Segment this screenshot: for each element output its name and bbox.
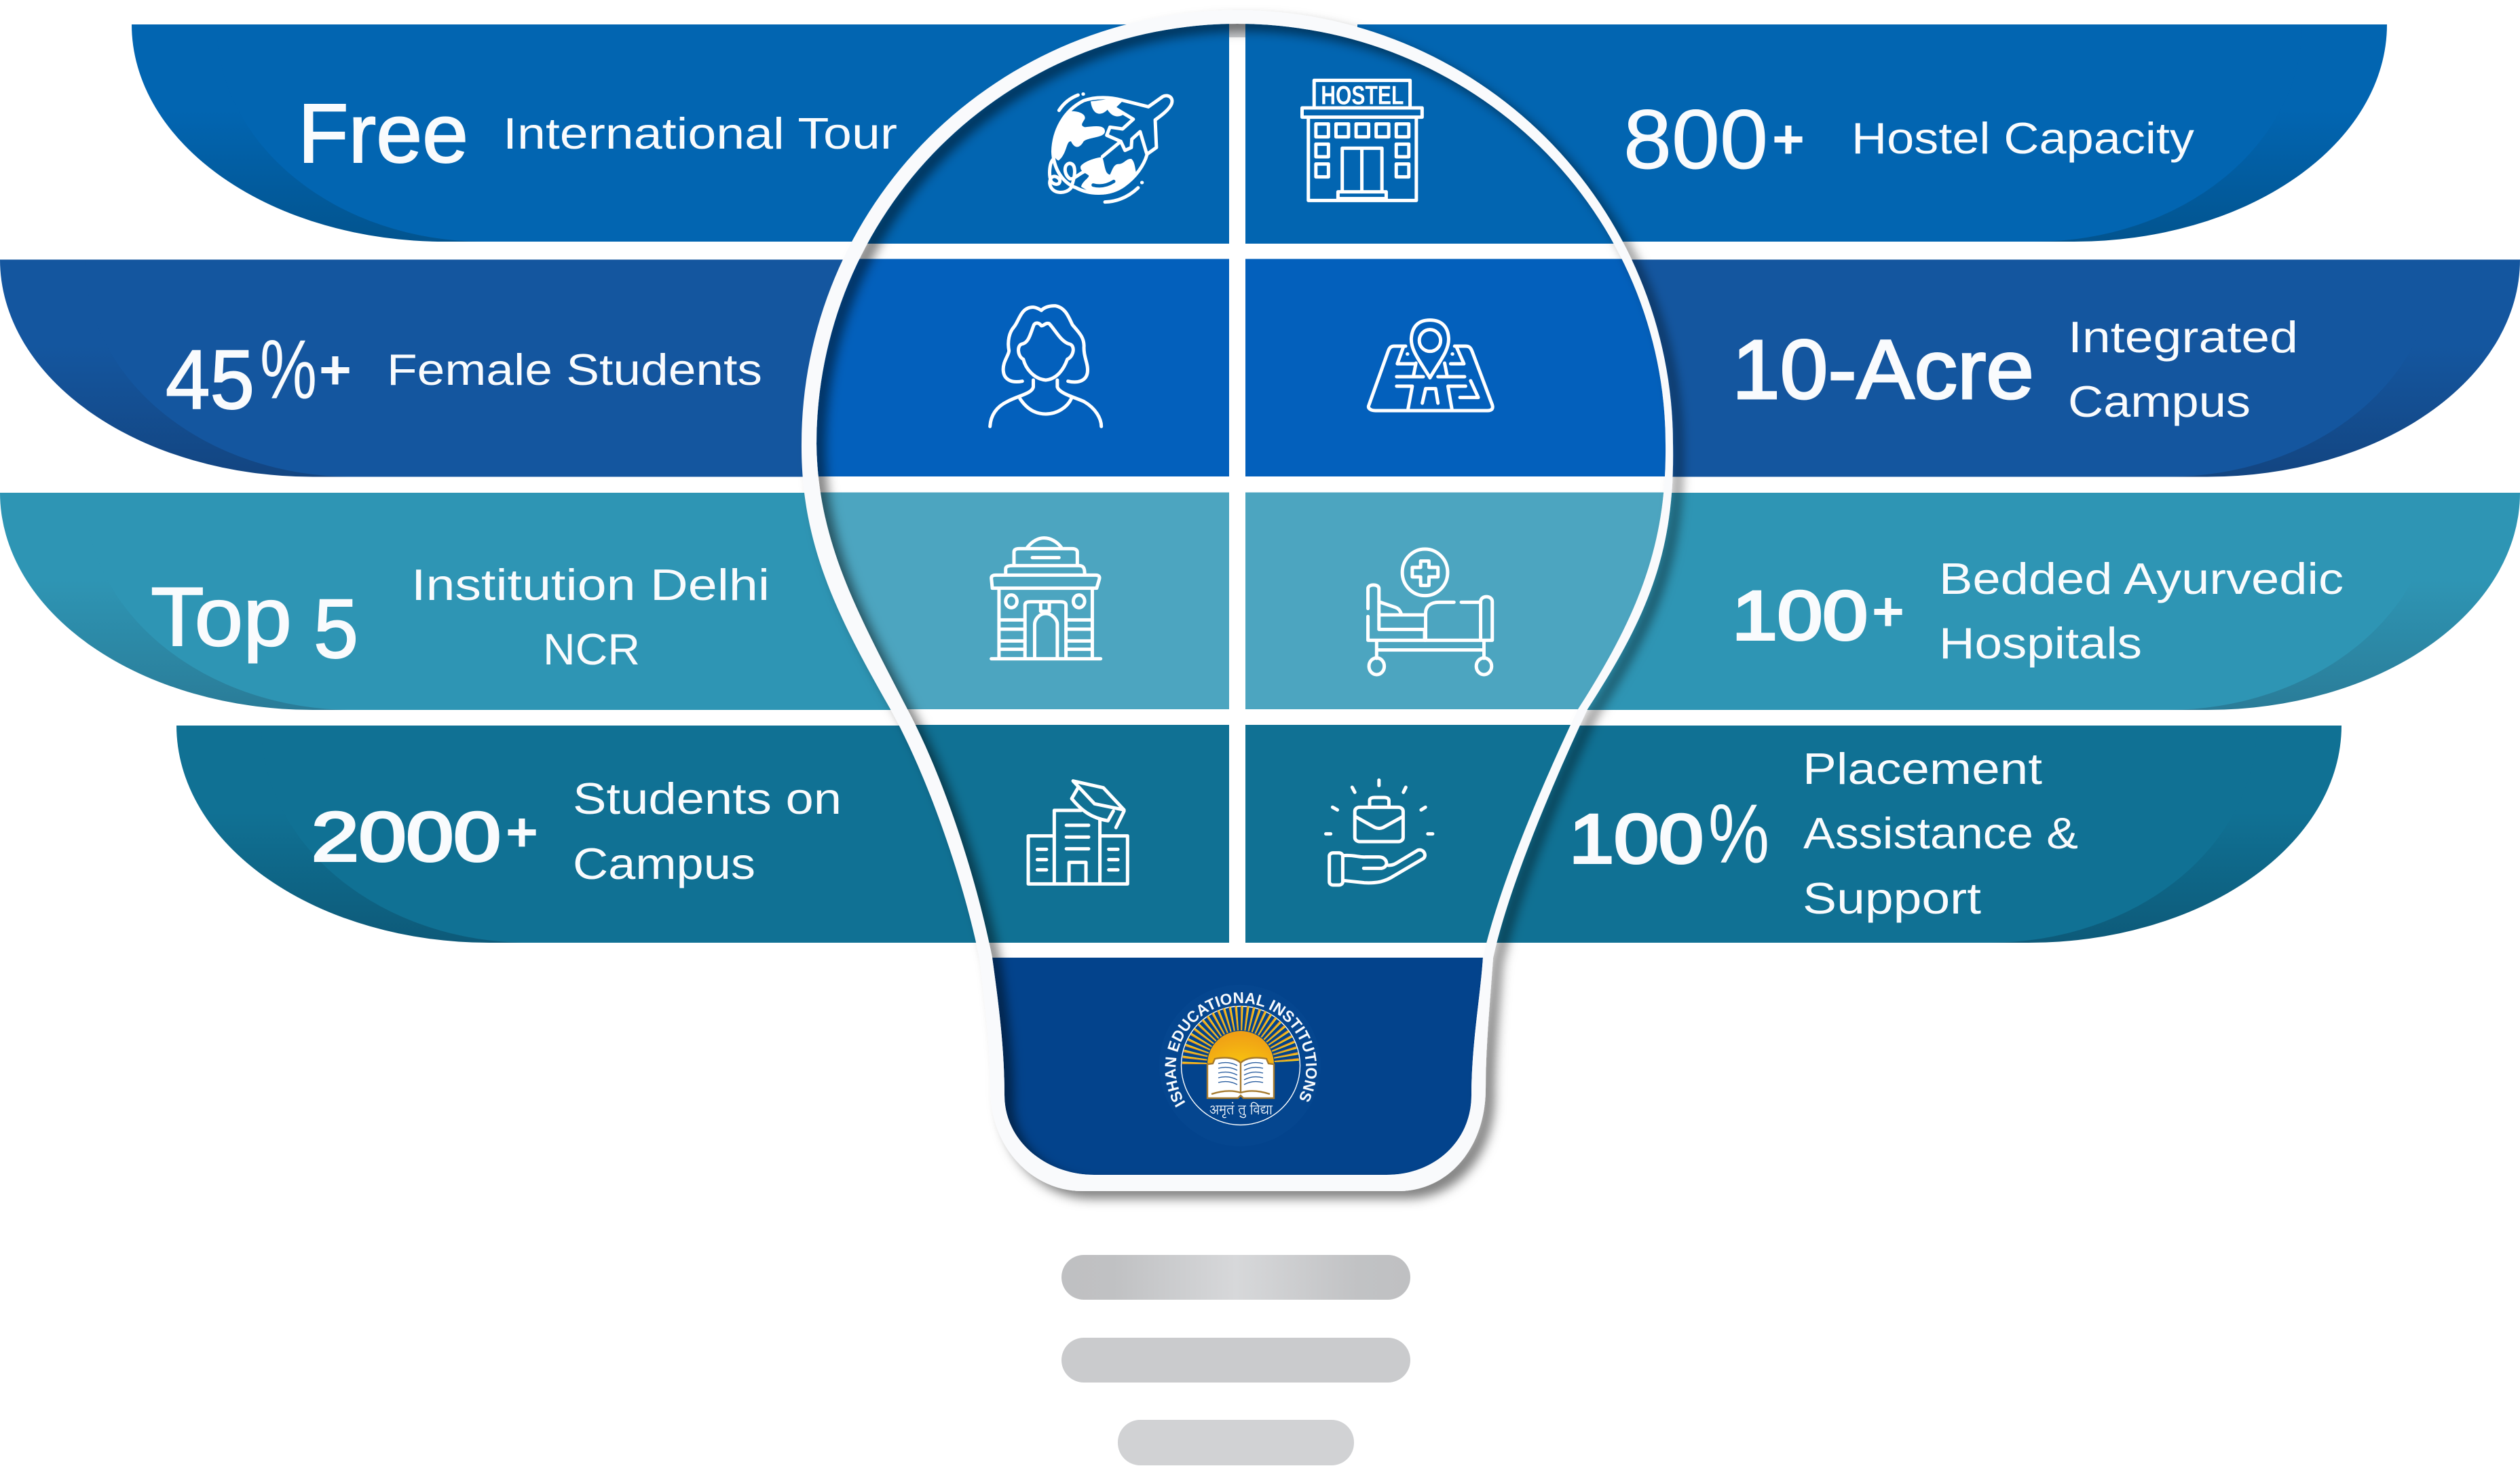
panel: 100% Placement Assistance and Support [1493,726,2342,943]
panel: Free International Tour [132,24,1154,242]
panel: Top 5 Institution Delhi NCR [0,493,950,710]
bulb base: top pill [1061,1255,1410,1300]
icon: briefcase on open hand [1326,780,1433,885]
icon: campus building with graduation cap [1028,781,1127,884]
text: Students on Campus [573,774,842,888]
icon: India Gate monument [992,538,1101,659]
text: Placement Assistance and Support: Placement [1803,744,2042,793]
text: Integrated Campus: Integrated [2068,312,2298,362]
logo rays [1195,1018,1287,1110]
headline: 100+ [1732,577,1904,654]
bulb outline ring [802,10,1673,1191]
headline: Free: Free [298,88,468,181]
icon: hospital bed [1368,549,1492,675]
panel: 45%+ Female Students [0,259,950,476]
headline: 800+: 800 [1623,94,1768,187]
headline: 10-Acre: 10-Acre [1732,324,2034,417]
headline: 2000+: + [506,802,538,863]
icon: globe and plane [1050,94,1172,202]
text: Institution Delhi NCR [411,560,770,674]
text: Hostel Capacity: Hostel Capacity [1851,113,2195,163]
vertical divider through bulb [1229,17,1245,37]
text: Integrated Campus [2068,312,2298,426]
headline: 2000+ [312,798,538,876]
panel: 10-Acre Integrated Campus [1561,259,2520,476]
panel: 2000+ Students on Campus [176,726,1018,943]
logo open book [1207,1057,1274,1098]
headline: 100+: 100 [1732,577,1868,654]
text: Placement Assistance and Support [1803,744,2078,923]
headline: 100%: % [1708,788,1769,881]
text: Institution Delhi NCR: NCR [543,624,640,674]
text: Bedded Ayurvedic Hospitals [1939,554,2344,668]
text: Students on Campus: Students on [573,774,842,823]
headline: 100+: + [1872,581,1904,643]
icon: hostel building: HOSTEL [1321,80,1404,110]
logo: Ishan Educational Institutions emblem [1165,992,1317,1125]
text: Institution Delhi NCR: Institution Delhi [411,560,770,609]
bulb base: middle pill [1061,1338,1410,1383]
text: Placement Assistance and Support: Assistance & [1803,808,2078,858]
headline: 45%+: + [319,339,352,401]
headline: Top 5: Top [151,571,292,664]
headline: 100% [1569,788,1769,881]
panel: 100+ Bedded Ayurvedic Hospitals [1561,493,2520,710]
headline: 800+: + [1772,109,1805,170]
icon: campus map pin [1368,320,1492,411]
logo circular name: ISHAN EDUCATIONAL INSTITUTIONS [1165,992,1317,1108]
text: Students on Campus: Campus [573,839,755,888]
text: Female Students: Female Students [387,345,762,394]
headline: Top 5: 5 [314,583,358,676]
text: Integrated Campus: Campus [2068,377,2251,426]
text: Bedded Ayurvedic Hospitals: Bedded Ayurvedic [1939,554,2344,603]
text: Placement Assistance and Support: Support [1803,873,1981,923]
icon: female student [990,306,1102,426]
text: International Tour: International Tour [503,109,897,158]
text: Bedded Ayurvedic Hospitals: Hospitals [1939,618,2142,668]
icon: hostel building [1302,80,1422,200]
bulb base: bottom pill [1118,1420,1354,1465]
headline: 2000+: 2000 [312,798,501,876]
headline: 100%: 100 [1569,800,1704,878]
headline: 45%+: 45 [166,334,255,427]
headline: 45%+: % [260,324,317,417]
headline: 45%+ [166,324,352,427]
logo motto: अमृतं तु विद्या [1209,1100,1273,1122]
panel: bulb interior cells [816,24,1666,1175]
headline: Top 5 [151,571,358,676]
panel: 800+ Hostel Capacity [1357,24,2387,242]
